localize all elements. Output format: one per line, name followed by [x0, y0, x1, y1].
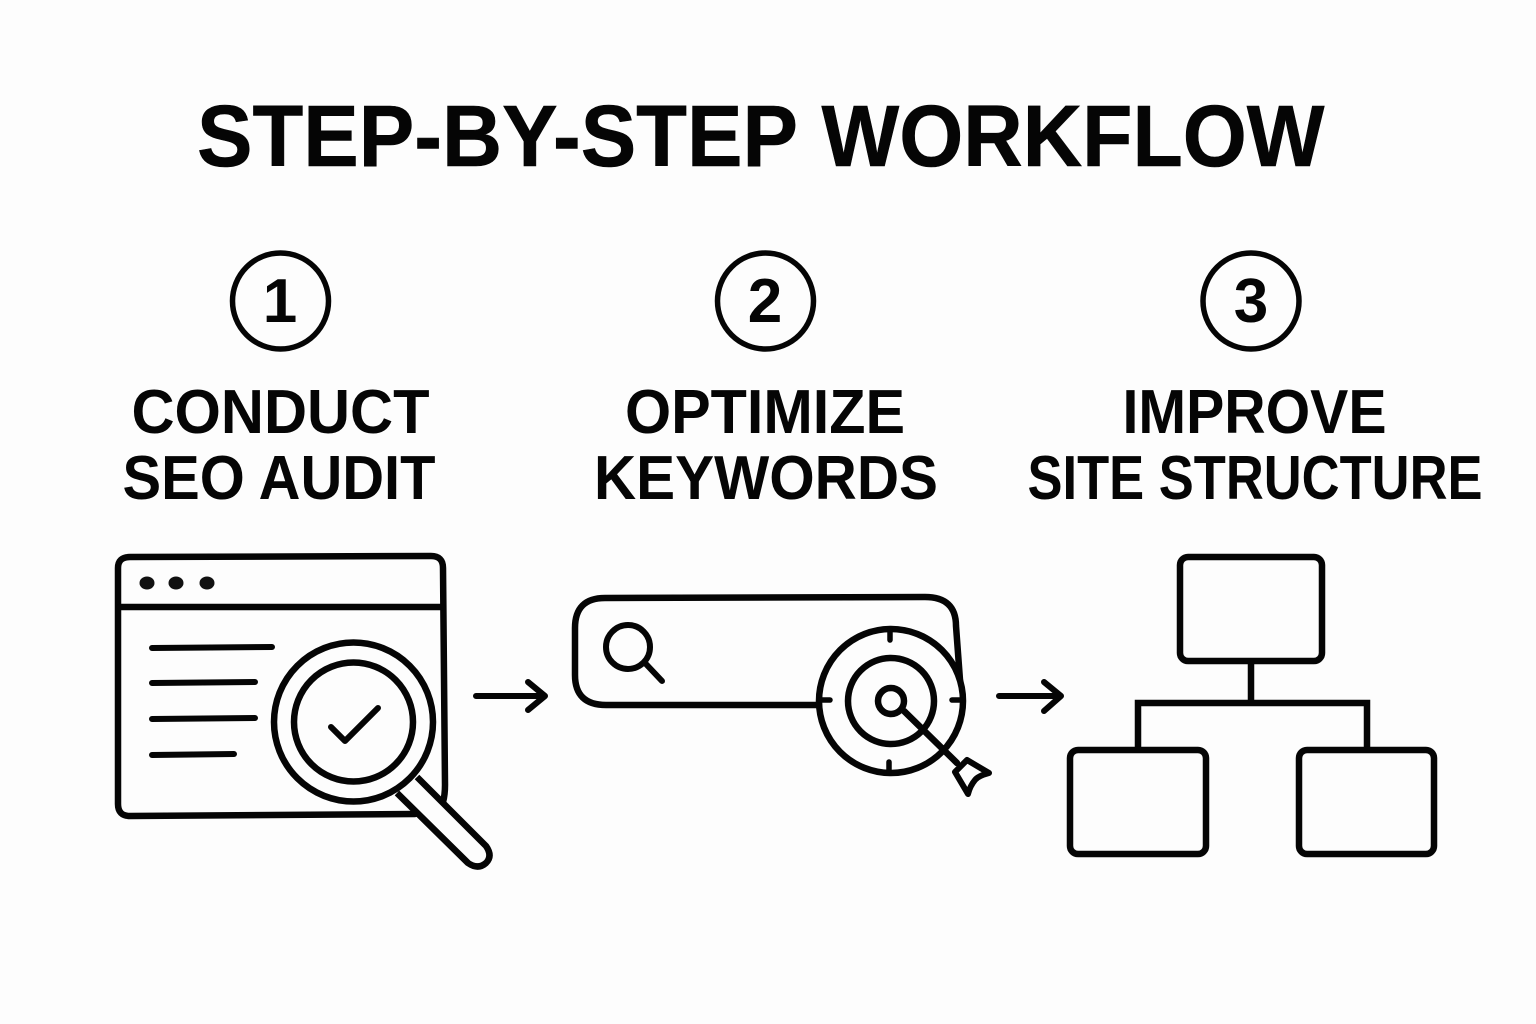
step 1 heading: SEO AUDIT — [122, 444, 436, 513]
step 1 heading: CONDUCT — [132, 378, 430, 447]
arrow: step 2 to step 3 — [999, 682, 1061, 711]
step 1 number badge: 1 — [263, 267, 297, 336]
arrow: step 1 to step 2 — [476, 682, 545, 710]
icon: site structure hierarchy — [1070, 557, 1434, 854]
title — [197, 88, 1325, 185]
step 3 heading: IMPROVE — [1122, 378, 1386, 447]
step 2 number badge: 2 — [748, 267, 782, 336]
step 3 heading — [1028, 378, 1482, 513]
title: STEP-BY-STEP — [197, 88, 798, 185]
step 3 number badge: 3 — [1234, 267, 1268, 336]
icon: search bar with target and arrow — [575, 597, 989, 794]
step 2 heading: OPTIMIZE — [625, 378, 905, 447]
step 3 number badge — [1203, 253, 1299, 349]
title: WORKFLOW — [822, 88, 1325, 185]
step 2 heading — [594, 378, 938, 513]
step 2 heading: KEYWORDS — [594, 444, 938, 513]
step 2 number badge — [718, 253, 814, 349]
step 1 heading — [122, 378, 436, 513]
icon: browser window with magnifying glass — [118, 556, 490, 866]
step 1 number badge — [232, 253, 328, 349]
